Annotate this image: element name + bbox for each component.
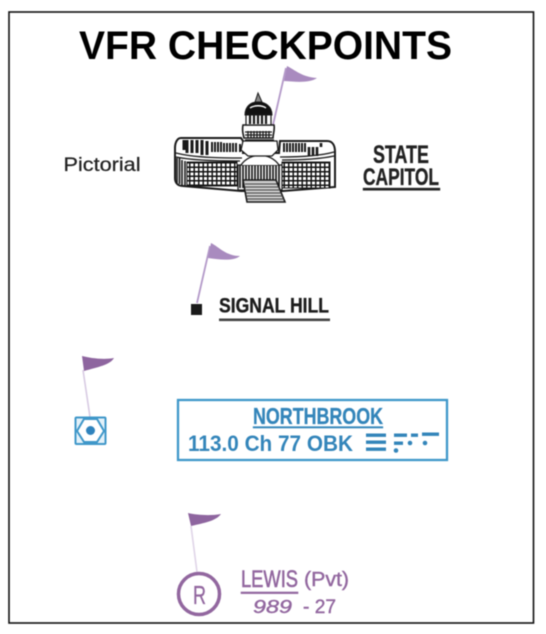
label: LEWIS (Pvt): (Pvt) <box>304 569 349 591</box>
checkpoint: Signal Hill <box>191 243 330 321</box>
label: elevation 989 - 27 <box>253 597 336 618</box>
label: STATE CAPITOL: STATE <box>373 141 429 169</box>
label: NORTHBROOK: NORTHBROOK <box>253 403 383 429</box>
icon: Lewis flag <box>188 513 221 572</box>
label: LEWIS (Pvt): LEWIS <box>241 566 298 593</box>
label: frequency and identifier: 113.0 Ch 77 OBK <box>188 431 353 456</box>
icon: morse code <box>366 432 439 453</box>
label: SIGNAL HILL: SIGNAL HILL <box>219 294 329 318</box>
checkpoint: state capitol <box>175 66 440 202</box>
icon: capitol building <box>175 93 335 202</box>
icon: VOR flag <box>82 356 114 417</box>
icon: private airport R symbol <box>178 574 220 614</box>
checkpoint: Lewis private airport <box>178 513 349 618</box>
label: STATE CAPITOL: CAPITOL <box>363 164 439 191</box>
label: STATE CAPITOL <box>363 141 440 191</box>
label: Pictorial: Pictorial <box>64 155 140 176</box>
icon: VOR symbol <box>76 418 106 444</box>
callout: Northbrook frequency box <box>178 400 447 460</box>
title: VFR CHECKPOINTS <box>79 24 452 68</box>
icon: black square <box>191 304 202 315</box>
icon: signal hill flag <box>197 243 240 303</box>
label: LEWIS (Pvt) <box>241 566 349 594</box>
label: elevation 989 - 27: - 27 <box>303 597 336 618</box>
icon: private airport R symbol: R <box>193 580 206 610</box>
icon: capitol flag <box>273 66 317 125</box>
checkpoint: Northbrook VOR <box>76 356 447 460</box>
label: elevation 989 - 27: 989 <box>253 597 292 617</box>
